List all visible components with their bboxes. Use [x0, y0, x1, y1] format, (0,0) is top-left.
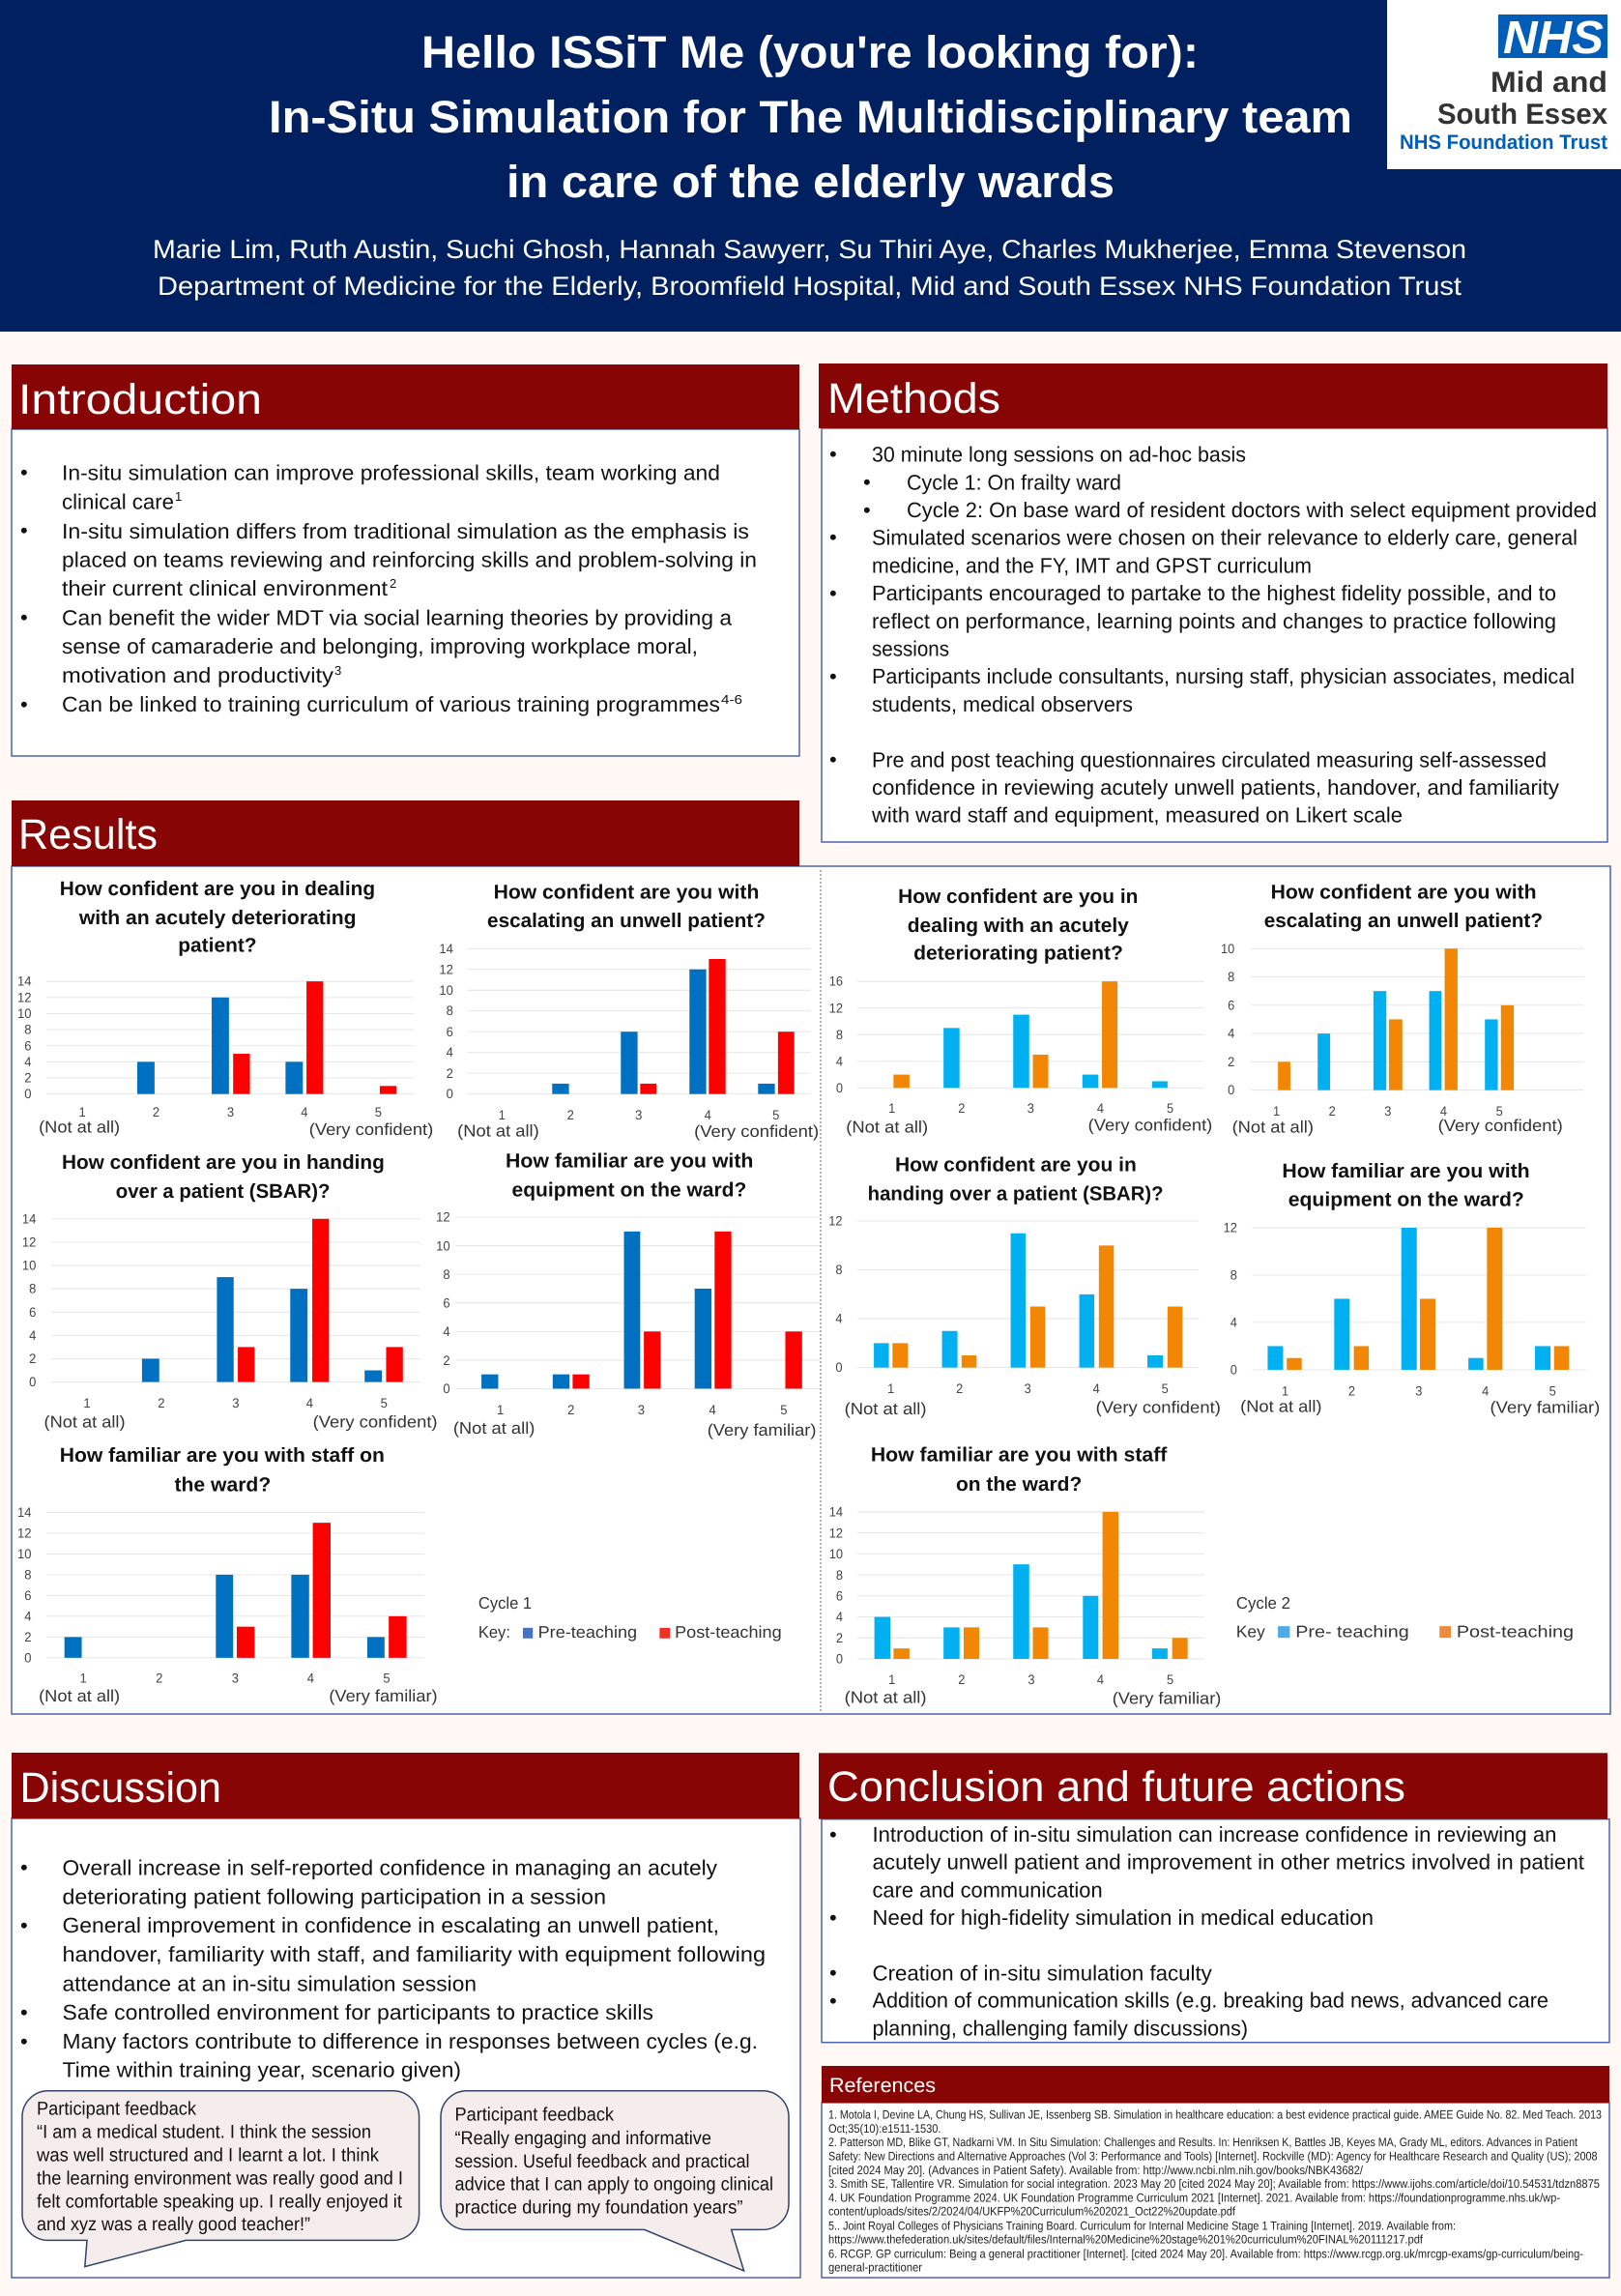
reference list: Oct;35(10):e1511-1530.	[828, 2122, 941, 2136]
reference list	[828, 2107, 1602, 2275]
methods bullets: 30 minute long sessions on ad-hoc basis	[872, 443, 1246, 467]
methods bullets: •	[863, 470, 871, 494]
panel: references	[822, 2066, 1609, 2278]
chart: cycle 2 handing over a patient: 0	[835, 1360, 843, 1376]
methods bullets: confidence in reviewing acutely unwell patients, handover, and familiarity	[872, 775, 1559, 799]
chart: cycle 1 escalating an unwell patient: 10	[439, 983, 453, 998]
methods bullets: •	[829, 747, 837, 771]
methods bullets: •	[829, 664, 837, 688]
chart: cycle 2 handing over a patient: 4	[1093, 1381, 1100, 1396]
chart: cycle 1 acutely deteriorating patient: 4	[301, 1105, 308, 1120]
conclusion bullets	[829, 1822, 1584, 2041]
reference list: general-practitioner	[828, 2261, 922, 2275]
chart: cycle 2 escalating an unwell patient: 5	[1496, 1104, 1503, 1119]
NHS logo: NHS	[1503, 13, 1604, 64]
chart: cycle 1 equipment on the ward: 4	[443, 1324, 450, 1339]
title: Hello ISSiT Me (you're looking for):	[421, 26, 1199, 77]
introduction bullets: In-situ simulation differs from traditional simulation as the emphasis is	[62, 519, 749, 543]
chart: cycle 1 acutely deteriorating patient: (Very confident)	[309, 1120, 433, 1139]
chart: cycle 2 acutely deteriorating patient: dealing with an acutely	[908, 914, 1129, 937]
chart: cycle 2 handing over a patient: 1	[887, 1381, 894, 1396]
chart: cycle 1 escalating an unwell patient: 6	[447, 1025, 453, 1039]
chart: cycle 1 acutely deteriorating patient: 8	[24, 1023, 32, 1037]
chart: cycle 1 escalating an unwell patient: 4	[447, 1045, 453, 1061]
chart: cycle 1 escalating an unwell patient: 3	[635, 1108, 642, 1123]
conclusion bullets: •	[829, 1905, 837, 1930]
chart: cycle 1 handing over a patient: 8	[29, 1282, 36, 1296]
chart: cycle 2 escalating an unwell patient: 3	[1384, 1104, 1391, 1119]
legend: cycle 1 key: Cycle 1	[478, 1594, 532, 1613]
chart: cycle 2 staff on the ward: on the ward?	[956, 1472, 1082, 1496]
chart: cycle 2 acutely deteriorating patient: 3	[1028, 1101, 1034, 1117]
chart: cycle 1 handing over a patient: 0	[29, 1375, 36, 1390]
chart: cycle 1 equipment on the ward: 2	[567, 1403, 574, 1417]
chart: cycle 2 handing over a patient: 12	[828, 1214, 843, 1229]
chart: cycle 1 equipment on the ward: 6	[443, 1296, 450, 1311]
chart: cycle 1 equipment on the ward: (Not at all)	[453, 1419, 535, 1438]
chart: cycle 2 handing over a patient: handing over a patient (SBAR)?	[868, 1181, 1164, 1205]
legend: cycle 1 key: Key:	[478, 1623, 510, 1642]
NHS logo: NHS Foundation Trust	[1400, 131, 1607, 154]
chart: cycle 1 equipment on the ward: 4	[709, 1403, 716, 1417]
discussion bullets	[20, 1855, 766, 2082]
chart: cycle 1 handing over a patient: over a patient (SBAR)?	[116, 1179, 330, 1203]
legend: cycle 2 key: Pre- teaching	[1295, 1623, 1409, 1642]
introduction bullets: •	[20, 460, 28, 484]
chart: cycle 1 escalating an unwell patient	[439, 881, 819, 1141]
chart: cycle 2 acutely deteriorating patient: 2	[958, 1101, 965, 1117]
title	[269, 26, 1352, 207]
methods bullets: with ward staff and equipment, measured on Likert scale	[871, 803, 1403, 828]
methods bullets: •	[829, 442, 837, 466]
chart: cycle 1 staff on the ward: 2	[156, 1671, 162, 1686]
chart: cycle 2 handing over a patient: (Not at all)	[845, 1400, 927, 1418]
chart: cycle 1 equipment on the ward: 1	[497, 1403, 504, 1417]
conclusion bullets: planning, challenging family discussions)	[872, 2017, 1248, 2041]
callout: participant feedback, medical student	[22, 2091, 420, 2267]
conclusion bullets: Addition of communication skills (e.g. breaking bad news, advanced care	[872, 1989, 1549, 2013]
discussion bullets: •	[20, 1855, 28, 1879]
chart: cycle 2 staff on the ward: 2	[958, 1672, 965, 1687]
panel: discussion	[12, 1753, 800, 2278]
chart: cycle 1 acutely deteriorating patient: with an acutely deteriorating	[78, 906, 357, 929]
conclusion bullets: •	[829, 1989, 837, 2013]
callout: participant feedback, medical student: felt comfortable speaking up. I really enjoyed it	[37, 2191, 403, 2212]
chart: cycle 1 acutely deteriorating patient: 0	[24, 1087, 32, 1102]
chart: cycle 1 escalating an unwell patient: escalating an unwell patient?	[487, 909, 766, 931]
discussion bullets: Overall increase in self-reported confidence in managing an acutely	[62, 1855, 717, 1879]
chart: cycle 2 staff on the ward	[829, 1443, 1221, 1707]
chart: cycle 1 equipment on the ward: (Very familiar)	[708, 1421, 816, 1439]
chart: cycle 1 equipment on the ward: How familiar are you with	[506, 1148, 753, 1172]
chart: cycle 1 equipment on the ward: equipment on the ward?	[512, 1177, 746, 1201]
chart: cycle 1 staff on the ward: 4	[24, 1609, 32, 1624]
conclusion bullets: Creation of in-situ simulation faculty	[872, 1961, 1212, 1985]
introduction bullets: •	[20, 692, 28, 716]
discussion bullets: General improvement in confidence in escalating an unwell patient,	[62, 1913, 719, 1937]
chart: cycle 1 staff on the ward: How familiar are you with staff on	[60, 1443, 385, 1467]
chart: cycle 1 acutely deteriorating patient: 4	[24, 1055, 32, 1069]
methods bullets: •	[829, 581, 837, 605]
methods bullets: Participants include consultants, nursing staff, physician associates, medical	[872, 664, 1575, 688]
chart: cycle 1 staff on the ward: (Not at all)	[39, 1687, 120, 1705]
conclusion bullets: Introduction of in-situ simulation can increase confidence in reviewing an	[872, 1822, 1556, 1846]
chart: cycle 1 escalating an unwell patient: 14	[439, 942, 453, 956]
introduction bullets: placed on teams reviewing and reinforcing skills and problem-solving in	[62, 548, 757, 572]
callout: participant feedback, foundation years: advice that I can apply to ongoing clinical	[454, 2174, 773, 2195]
methods bullets: sessions	[872, 636, 949, 661]
chart: cycle 2 equipment on the ward: equipment on the ward?	[1288, 1188, 1524, 1210]
chart: cycle 2 acutely deteriorating patient: deteriorating patient?	[913, 942, 1123, 964]
legend: cycle 1 key: Pre-teaching	[538, 1623, 637, 1642]
chart: cycle 1 handing over a patient: 6	[29, 1305, 36, 1320]
introduction bullets: their current clinical environment	[62, 576, 388, 600]
chart: cycle 2 staff on the ward: 4	[836, 1610, 843, 1624]
conclusion bullets: •	[829, 1822, 837, 1846]
methods bullets: Cycle 2: On base ward of resident doctors with select equipment provided	[907, 498, 1597, 522]
chart: cycle 2 handing over a patient: 2	[956, 1381, 963, 1396]
introduction bullets: motivation and productivity	[62, 663, 333, 687]
chart: cycle 1 acutely deteriorating patient	[17, 877, 433, 1139]
chart: cycle 2 staff on the ward: 2	[836, 1631, 843, 1645]
chart: cycle 2 equipment on the ward	[1224, 1159, 1600, 1417]
conclusion bullets: Need for high-fidelity simulation in medical education	[872, 1905, 1374, 1930]
chart: cycle 2 escalating an unwell patient: 10	[1221, 942, 1234, 956]
introduction bullets	[20, 460, 757, 716]
chart: cycle 1 acutely deteriorating patient: 2	[153, 1105, 159, 1120]
callout: participant feedback, foundation years	[441, 2091, 789, 2271]
chart: cycle 1 equipment on the ward: 12	[436, 1210, 450, 1225]
chart: cycle 1 staff on the ward: 5	[383, 1671, 391, 1686]
chart: cycle 2 staff on the ward: (Very familiar)	[1113, 1690, 1221, 1707]
conclusion bullets: •	[829, 1961, 837, 1985]
chart: cycle 1 handing over a patient: 4	[29, 1328, 36, 1343]
legend: cycle 2 key: Key	[1236, 1623, 1265, 1642]
introduction bullets: 4-6	[721, 692, 742, 707]
reference list: content/uploads/sites/2/2024/04/UKFP%20Curriculum%202021_Oct22%20update.pdf	[828, 2204, 1235, 2218]
chart: cycle 2 equipment on the ward: 12	[1224, 1221, 1237, 1235]
chart: cycle 2 equipment on the ward: How familiar are you with	[1282, 1159, 1530, 1181]
introduction bullets: 1	[175, 489, 182, 504]
discussion bullets: •	[20, 2000, 28, 2024]
introduction bullets: clinical care	[62, 489, 174, 513]
legend: cycle 1 key: Post-teaching	[675, 1623, 782, 1642]
chart: cycle 2 escalating an unwell patient: 2	[1228, 1055, 1234, 1069]
heading: conclusion and future actions: Conclusion and future actions	[827, 1763, 1405, 1811]
chart: cycle 1 escalating an unwell patient: 2	[567, 1108, 574, 1123]
panel: introduction	[12, 364, 799, 756]
chart: cycle 1 acutely deteriorating patient: 5	[375, 1105, 382, 1120]
chart: cycle 2 acutely deteriorating patient: 4	[836, 1054, 843, 1069]
chart: cycle 2 equipment on the ward: (Not at all)	[1240, 1398, 1321, 1416]
chart: cycle 2 equipment on the ward: 4	[1230, 1316, 1237, 1330]
chart: cycle 2 acutely deteriorating patient: How confident are you in	[898, 885, 1138, 908]
introduction bullets: sense of camaraderie and belonging, improving workplace moral,	[62, 634, 698, 658]
chart: cycle 2 acutely deteriorating patient: (Not at all)	[846, 1118, 928, 1136]
discussion bullets: handover, familiarity with staff, and familiarity with equipment following	[62, 1942, 766, 1966]
chart: cycle 1 escalating an unwell patient: (Not at all)	[457, 1121, 539, 1140]
chart: cycle 2 escalating an unwell patient: 4	[1440, 1104, 1447, 1119]
chart: cycle 1 handing over a patient: 14	[22, 1211, 36, 1227]
chart: cycle 2 handing over a patient: 8	[835, 1263, 843, 1278]
reference list: https://www.thefederation.uk/sites/default/files/Internal%20Medicine%20stage%201%20curriculum%20FINAL%20111217.pdf	[828, 2233, 1423, 2247]
chart: cycle 1 equipment on the ward: 3	[638, 1403, 645, 1417]
methods bullets: reflect on performance, learning points and changes to practice following	[872, 609, 1556, 633]
chart: cycle 2 handing over a patient: 5	[1162, 1381, 1169, 1396]
discussion bullets: •	[20, 1913, 28, 1937]
chart: cycle 1 escalating an unwell patient: 1	[499, 1108, 506, 1123]
chart: cycle 1 staff on the ward: 0	[24, 1650, 32, 1666]
chart: cycle 1 staff on the ward	[17, 1443, 438, 1705]
chart: cycle 2 escalating an unwell patient: 0	[1228, 1083, 1234, 1098]
discussion bullets: attendance at an in-situ simulation session	[62, 1971, 477, 1995]
legend: cycle 2 key: Cycle 2	[1236, 1594, 1290, 1613]
introduction bullets: Can benefit the wider MDT via social learning theories by providing a	[62, 605, 733, 629]
chart: cycle 2 acutely deteriorating patient: 0	[836, 1081, 843, 1095]
chart: cycle 2 equipment on the ward: (Very familiar)	[1491, 1399, 1600, 1417]
chart: cycle 2 handing over a patient: 3	[1025, 1381, 1031, 1396]
chart: cycle 2 equipment on the ward: 8	[1230, 1267, 1237, 1283]
chart: cycle 2 staff on the ward: 14	[829, 1504, 843, 1520]
methods bullets: Cycle 1: On frailty ward	[907, 470, 1121, 494]
chart: cycle 1 escalating an unwell patient: 0	[447, 1087, 453, 1102]
chart: cycle 1 escalating an unwell patient: How confident are you with	[494, 881, 759, 903]
chart: cycle 1 staff on the ward: 1	[80, 1671, 87, 1686]
introduction bullets: In-situ simulation can improve professional skills, team working and	[62, 460, 720, 485]
discussion bullets: Many factors contribute to difference in responses between cycles (e.g.	[62, 2029, 758, 2053]
chart: cycle 2 escalating an unwell patient: escalating an unwell patient?	[1264, 909, 1543, 931]
chart: cycle 2 acutely deteriorating patient: (Very confident)	[1088, 1117, 1212, 1135]
chart: cycle 2 equipment on the ward: 3	[1415, 1383, 1422, 1399]
chart: cycle 1 handing over a patient: 1	[83, 1396, 91, 1410]
discussion bullets: Safe controlled environment for participants to practice skills	[62, 2000, 653, 2024]
chart: cycle 2 staff on the ward: How familiar are you with staff	[871, 1443, 1168, 1466]
chart: cycle 1 equipment on the ward: 5	[780, 1403, 787, 1417]
chart: cycle 1 handing over a patient: 5	[381, 1396, 388, 1410]
methods bullets: •	[863, 498, 871, 522]
header banner	[0, 0, 1621, 332]
chart: cycle 1 handing over a patient: 12	[22, 1235, 36, 1250]
chart: cycle 1 handing over a patient: 2	[29, 1351, 36, 1366]
chart: cycle 2 equipment on the ward: 2	[1348, 1383, 1355, 1399]
heading: references: References	[829, 2075, 936, 2097]
chart: cycle 2 equipment on the ward: 1	[1282, 1383, 1288, 1399]
chart: cycle 1 staff on the ward: 10	[17, 1547, 32, 1562]
chart: cycle 1 staff on the ward: 12	[17, 1526, 32, 1541]
chart: cycle 1 escalating an unwell patient: 8	[447, 1003, 453, 1019]
authors and department: Department of Medicine for the Elderly, Broomfield Hospital, Mid and South Essex NHS Foundation Trust	[158, 272, 1462, 301]
callout: participant feedback, foundation years: Participant feedback	[454, 2104, 614, 2125]
chart: cycle 2 staff on the ward: 4	[1097, 1672, 1104, 1687]
chart: cycle 1 acutely deteriorating patient: 14	[17, 974, 32, 989]
chart: cycle 1 staff on the ward: 4	[307, 1671, 314, 1686]
panel: results	[12, 800, 1610, 1714]
panel: methods	[819, 363, 1607, 842]
NHS logo: Mid and	[1491, 67, 1607, 99]
methods bullets: Pre and post teaching questionnaires circulated measuring self-assessed	[872, 747, 1547, 771]
chart: cycle 1 acutely deteriorating patient: 6	[24, 1038, 32, 1054]
chart: cycle 1 handing over a patient: 3	[232, 1396, 240, 1410]
chart: cycle 2 handing over a patient: 4	[835, 1312, 843, 1326]
discussion bullets: •	[20, 2029, 28, 2053]
panel: conclusion and future actions	[819, 1753, 1609, 2043]
introduction bullets: •	[20, 518, 28, 542]
chart: cycle 2 escalating an unwell patient: 2	[1329, 1104, 1336, 1119]
title: in care of the elderly wards	[507, 156, 1114, 207]
chart: cycle 1 staff on the ward: 6	[24, 1588, 32, 1604]
chart: cycle 1 handing over a patient: 4	[306, 1396, 313, 1410]
introduction bullets: 2	[390, 576, 396, 591]
methods bullets: medicine, and the FY, IMT and GPST curriculum	[872, 553, 1312, 577]
chart: cycle 2 escalating an unwell patient: 6	[1228, 998, 1234, 1013]
reference list: [cited 2024 May 20]. (Advances in Patient Safety). Available from: http://www.ncbi.nlm.nih.gov/books/NBK43682/	[828, 2164, 1363, 2177]
chart: cycle 2 escalating an unwell patient: 1	[1273, 1104, 1280, 1119]
methods bullets: students, medical observers	[872, 692, 1133, 716]
authors and department: Marie Lim, Ruth Austin, Suchi Ghosh, Hannah Sawyerr, Su Thiri Aye, Charles Mukherjee, Emma Stevenson	[153, 235, 1466, 264]
chart: cycle 2 acutely deteriorating patient: 5	[1167, 1101, 1173, 1117]
chart: cycle 1 acutely deteriorating patient: 12	[17, 990, 32, 1005]
cycle 1 charts	[17, 877, 820, 1705]
title: In-Situ Simulation for The Multidisciplinary team	[269, 91, 1352, 142]
introduction bullets: •	[20, 605, 28, 629]
legend: cycle 1 key	[478, 1594, 782, 1642]
chart: cycle 1 handing over a patient: How confident are you in handing	[62, 1150, 385, 1174]
callout: participant feedback, foundation years: practice during my foundation years”	[454, 2196, 742, 2218]
chart: cycle 1 acutely deteriorating patient: How confident are you in dealing	[60, 877, 375, 900]
chart: cycle 2 acutely deteriorating patient: 1	[888, 1101, 895, 1117]
conclusion bullets: acutely unwell patient and improvement in other metrics involved in patient	[872, 1849, 1584, 1874]
chart: cycle 1 equipment on the ward: 8	[443, 1267, 450, 1282]
NHS logo: South Essex	[1437, 99, 1607, 131]
heading: results: Results	[18, 811, 158, 858]
legend: cycle 2 key	[1236, 1594, 1574, 1642]
chart: cycle 2 staff on the ward: 8	[836, 1568, 843, 1583]
authors and department	[153, 235, 1466, 301]
chart: cycle 1 equipment on the ward: 10	[436, 1238, 450, 1254]
reference list: 5.. Joint Royal Colleges of Physicians Training Board. Curriculum for Internal Medicine Stage 1 Training [Internet]. 2019. Available from:	[828, 2220, 1456, 2233]
chart: cycle 2 staff on the ward: 1	[888, 1672, 895, 1687]
chart: cycle 2 acutely deteriorating patient: 4	[1097, 1101, 1104, 1117]
discussion bullets: deteriorating patient following participation in a session	[62, 1884, 606, 1908]
chart: cycle 2 escalating an unwell patient: How confident are you with	[1271, 881, 1537, 903]
chart: cycle 1 handing over a patient	[22, 1150, 438, 1432]
callout: participant feedback, medical student: Participant feedback	[37, 2099, 196, 2120]
chart: cycle 2 staff on the ward: 10	[829, 1547, 843, 1562]
chart: cycle 2 handing over a patient: How confident are you in	[895, 1152, 1137, 1176]
callout: participant feedback, medical student: “I am a medical student. I think the session	[37, 2121, 371, 2142]
chart: cycle 2 staff on the ward: 0	[836, 1652, 843, 1667]
callout: participant feedback, foundation years: session. Useful feedback and practical	[454, 2151, 750, 2172]
chart: cycle 1 handing over a patient: 2	[158, 1396, 165, 1410]
chart: cycle 1 equipment on the ward: 2	[443, 1353, 450, 1368]
NHS logo	[1387, 0, 1621, 169]
chart: cycle 1 escalating an unwell patient: 5	[772, 1108, 779, 1123]
conclusion bullets: care and communication	[872, 1877, 1103, 1902]
chart: cycle 2 acutely deteriorating patient: 16	[829, 974, 843, 989]
introduction bullets: Can be linked to training curriculum of various training programmes	[62, 692, 720, 716]
discussion bullets: Time within training year, scenario given)	[62, 2058, 461, 2082]
chart: cycle 2 staff on the ward: 5	[1167, 1672, 1173, 1687]
chart: cycle 2 equipment on the ward: 5	[1549, 1383, 1556, 1399]
methods bullets	[829, 442, 1597, 828]
chart: cycle 1 escalating an unwell patient: (Very confident)	[694, 1122, 819, 1141]
chart: cycle 1 staff on the ward: 3	[232, 1671, 239, 1686]
chart: cycle 1 acutely deteriorating patient: (Not at all)	[39, 1118, 120, 1136]
chart: cycle 2 escalating an unwell patient: (Very confident)	[1438, 1117, 1563, 1135]
callout: participant feedback, medical student: was well structured and I learnt a lot. I think	[36, 2144, 379, 2165]
chart: cycle 1 handing over a patient: (Not at all)	[44, 1413, 126, 1432]
chart: cycle 1 acutely deteriorating patient: 2	[24, 1071, 32, 1086]
methods bullets: Participants encouraged to partake to the highest fidelity possible, and to	[872, 581, 1556, 605]
chart: cycle 1 staff on the ward: 8	[24, 1567, 32, 1583]
chart: cycle 2 escalating an unwell patient: 8	[1228, 970, 1234, 985]
chart: cycle 2 equipment on the ward: 4	[1482, 1383, 1489, 1399]
chart: cycle 2 handing over a patient: (Very confident)	[1096, 1399, 1221, 1417]
chart: cycle 1 equipment on the ward	[436, 1148, 820, 1439]
heading: discussion: Discussion	[19, 1764, 221, 1812]
chart: cycle 1 staff on the ward: 14	[17, 1505, 32, 1520]
chart: cycle 1 acutely deteriorating patient: 3	[227, 1105, 234, 1120]
callout: participant feedback, medical student: and xyz was a really good teacher!”	[37, 2214, 310, 2235]
methods bullets: Simulated scenarios were chosen on their relevance to elderly care, general	[872, 526, 1578, 550]
chart: cycle 1 acutely deteriorating patient: patient?	[178, 934, 257, 956]
heading: methods: Methods	[827, 375, 1000, 422]
chart: cycle 1 equipment on the ward: 0	[443, 1381, 450, 1396]
chart: cycle 1 escalating an unwell patient: 2	[447, 1066, 453, 1081]
cycle 2 charts	[828, 881, 1600, 1707]
chart: cycle 1 handing over a patient: 10	[22, 1259, 36, 1273]
chart: cycle 2 staff on the ward: 3	[1028, 1672, 1034, 1687]
methods bullets: •	[829, 525, 837, 549]
callout: participant feedback, foundation years: “Really engaging and informative	[454, 2128, 711, 2149]
chart: cycle 2 staff on the ward: (Not at all)	[845, 1688, 927, 1706]
heading: introduction: Introduction	[18, 376, 262, 423]
chart: cycle 2 escalating an unwell patient: (Not at all)	[1232, 1118, 1314, 1136]
chart: cycle 2 escalating an unwell patient: 4	[1228, 1027, 1234, 1041]
chart: cycle 2 staff on the ward: 12	[829, 1526, 843, 1541]
chart: cycle 1 escalating an unwell patient: 12	[439, 963, 453, 977]
chart: cycle 1 acutely deteriorating patient: 10	[17, 1006, 32, 1021]
chart: cycle 2 acutely deteriorating patient: 8	[836, 1028, 843, 1042]
chart: cycle 1 handing over a patient: (Very confident)	[313, 1413, 438, 1432]
chart: cycle 1 staff on the ward: the ward?	[174, 1473, 271, 1496]
chart: cycle 2 escalating an unwell patient	[1221, 881, 1583, 1136]
chart: cycle 2 acutely deteriorating patient: 12	[829, 1001, 843, 1016]
chart: cycle 1 staff on the ward: 2	[24, 1630, 32, 1645]
chart: cycle 2 staff on the ward: 6	[836, 1589, 843, 1604]
chart: cycle 1 staff on the ward: (Very familiar)	[329, 1687, 438, 1705]
chart: cycle 1 acutely deteriorating patient: 1	[78, 1105, 86, 1120]
chart: cycle 2 equipment on the ward: 0	[1230, 1362, 1237, 1378]
introduction bullets: 3	[334, 663, 341, 678]
chart: cycle 2 acutely deteriorating patient	[829, 885, 1212, 1136]
callout: participant feedback, medical student: the learning environment was really good and I	[37, 2167, 403, 2189]
chart: cycle 1 escalating an unwell patient: 4	[705, 1108, 711, 1123]
legend: cycle 2 key: Post-teaching	[1457, 1623, 1574, 1642]
chart: cycle 2 handing over a patient	[828, 1152, 1221, 1418]
